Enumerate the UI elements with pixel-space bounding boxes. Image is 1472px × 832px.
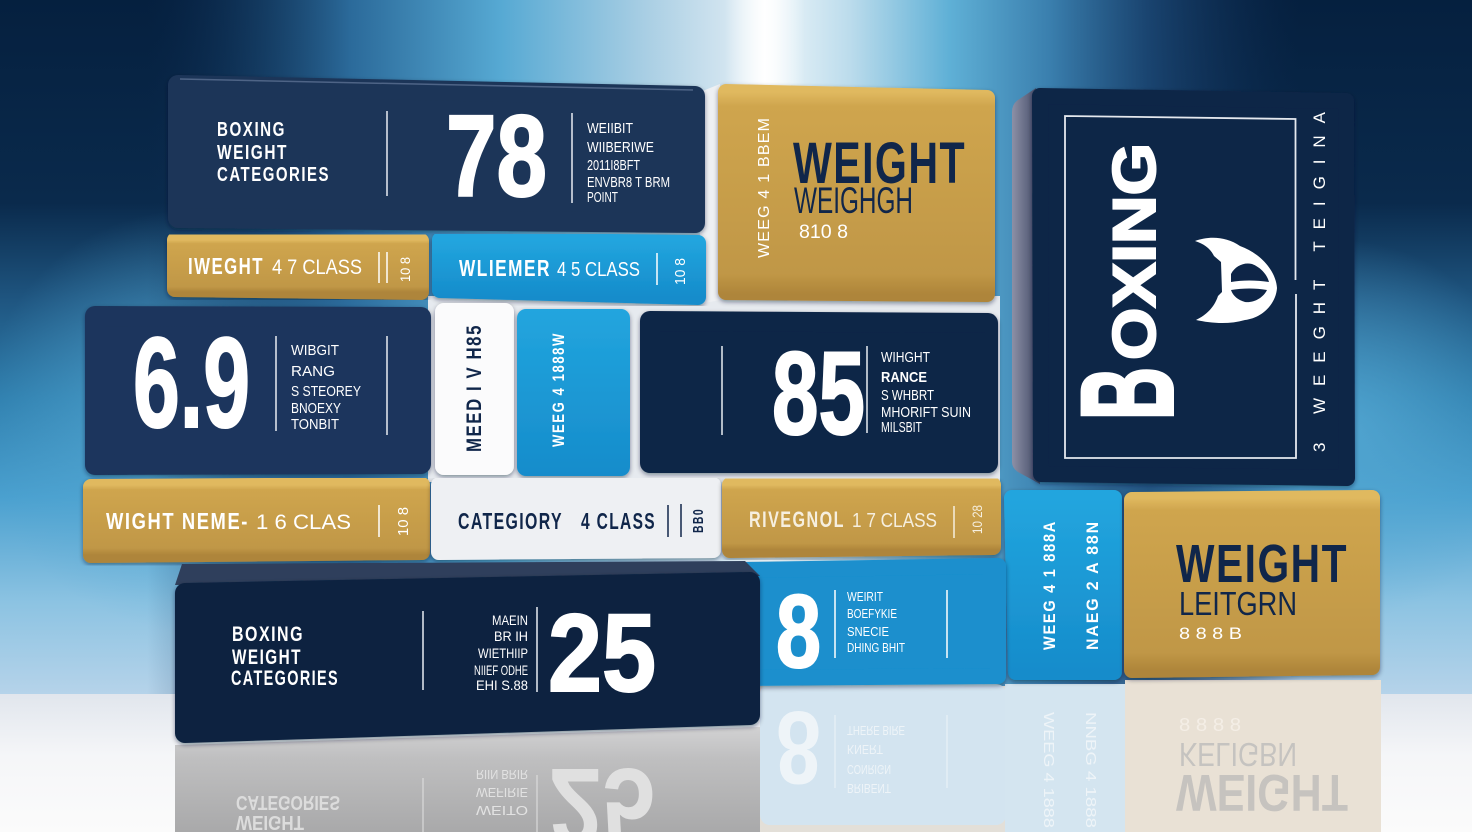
panel: gold weight class bar bbox=[175, 240, 421, 292]
frame bbox=[1065, 116, 1296, 458]
top face bbox=[175, 561, 760, 585]
small text block: BR IH bbox=[494, 628, 528, 644]
reflection: navy block: WEFIRIE bbox=[476, 785, 528, 800]
small text block: TONBIT bbox=[291, 416, 339, 433]
small numbers: 8 8 8 B bbox=[1179, 624, 1242, 643]
reflection: narrow blue block: NNBG 4 1888 bbox=[1082, 712, 1099, 828]
small text block: BNOEXY bbox=[291, 400, 341, 417]
vertical label: WEEG 4 1888W bbox=[549, 332, 568, 447]
small text block: WEIIBIT bbox=[587, 120, 633, 137]
title: boxing vertical: OXING bbox=[1101, 143, 1168, 360]
floor reflections of the blocks bbox=[175, 680, 1381, 832]
reflection: navy block bbox=[175, 727, 760, 832]
vertical label: WEEG 4 1 BBEM bbox=[756, 118, 773, 258]
label: 4 CLASS bbox=[581, 508, 656, 534]
title: boxing vertical: B bbox=[1054, 367, 1200, 420]
panel: blue weight class bar bbox=[440, 240, 698, 297]
number: 25: 25 bbox=[548, 592, 656, 715]
small text block: MAEIN bbox=[492, 612, 528, 628]
small text block: WIHGHT bbox=[881, 349, 930, 366]
number: 85: 85 bbox=[772, 328, 865, 460]
block side bbox=[1012, 88, 1040, 484]
small text block: ENVBR8 T BRM bbox=[587, 174, 670, 191]
heading: boxing weight categories: WEIGHT bbox=[217, 142, 288, 164]
small text block bbox=[587, 120, 670, 206]
label bbox=[749, 507, 937, 532]
label: class text: 4 5 CLASS bbox=[557, 259, 640, 281]
heading: boxing weight categories: CATEGORIES bbox=[217, 164, 330, 186]
panel: gold category bar bbox=[730, 485, 993, 550]
panel: gold category bar: 10 28 bbox=[969, 505, 985, 534]
small text block: WIIBERIWE bbox=[587, 139, 654, 156]
small text block bbox=[881, 349, 971, 436]
panel: white category bar bbox=[439, 485, 713, 552]
label: class text bbox=[459, 255, 640, 281]
small text block bbox=[847, 589, 905, 655]
panel: navy 25 block bbox=[175, 561, 760, 733]
reflection: navy block: CATEGORIES bbox=[236, 791, 340, 813]
small text block: WIBGIT bbox=[291, 342, 339, 359]
label: weight class: IWEGHT bbox=[188, 253, 264, 279]
panel: blue weight class bar: 10 8 bbox=[672, 258, 689, 285]
panel: white category bar: BB0 bbox=[690, 508, 707, 533]
panel: gold weight block lower bbox=[1132, 498, 1372, 670]
reflection: navy block: WEITO bbox=[476, 803, 528, 818]
small text block bbox=[291, 342, 361, 433]
panel: blue narrow block bbox=[1012, 498, 1114, 672]
reflection: narrow blue block bbox=[1005, 684, 1125, 832]
small number: 810 8 bbox=[799, 222, 848, 243]
light backing behind centre stack bbox=[428, 296, 1000, 482]
panel: blue 18 block bbox=[745, 566, 998, 690]
heading: boxing weight categories: BOXING bbox=[232, 623, 304, 646]
reflection: blue block: CONRIGN bbox=[847, 762, 891, 777]
heading: boxing weight categories: BOXING bbox=[217, 119, 286, 141]
reflection: narrow blue block: WEEG 4 1888 bbox=[1040, 712, 1057, 828]
icon: boxing glove emblem bbox=[1195, 238, 1277, 323]
reflection: blue block: BRIBENT bbox=[847, 781, 891, 796]
label: class text: WLIEMER bbox=[459, 255, 551, 281]
small text block: RANCE bbox=[881, 369, 927, 386]
panel: boxing cover block bbox=[1012, 88, 1347, 484]
reflective floor bbox=[0, 694, 1472, 832]
small text block: BOEFYKIE bbox=[847, 606, 897, 621]
reflection: blue block bbox=[760, 684, 1006, 832]
reflection: blue block: THERE BIRE bbox=[847, 723, 905, 738]
panel: gold weight name bar bbox=[91, 485, 422, 555]
small text block: S STEOREY bbox=[291, 383, 361, 400]
small text block: RANG bbox=[291, 363, 335, 380]
vertical labels: NAEG 2 A 88N bbox=[1083, 520, 1102, 650]
label: weight class bbox=[188, 253, 362, 279]
reflection: gold block: 8 8 8 8 bbox=[1179, 715, 1241, 735]
small text block: MILSBIT bbox=[881, 419, 922, 436]
reflection: gold block bbox=[1125, 680, 1381, 832]
small text block: SNECIE bbox=[847, 624, 889, 639]
reflection: navy block: RIIN BRIR bbox=[476, 767, 528, 782]
small text block bbox=[474, 612, 528, 693]
reflection: gold block: WEIGHT bbox=[1176, 763, 1348, 821]
number: 8: 8 bbox=[776, 574, 821, 690]
small text block: WEIRIT bbox=[847, 589, 883, 604]
vertical caption: 3 WEEGHT TEIGINA bbox=[1310, 111, 1329, 452]
reflection: blue block: 8 bbox=[776, 689, 821, 805]
label: WIGHT NEME- bbox=[106, 508, 249, 534]
label: weight class: 4 7 CLASS bbox=[272, 256, 362, 279]
vertical label: MEED I V H85 bbox=[463, 324, 486, 452]
small text block: DHING BHIT bbox=[847, 640, 905, 655]
small text block: POINT bbox=[587, 189, 618, 206]
panel: gold weight name bar: 10 8 bbox=[395, 507, 412, 536]
small text block: S WHBRT bbox=[881, 387, 934, 404]
number: 78: 78 bbox=[446, 91, 547, 221]
label: CATEGIORY bbox=[458, 508, 563, 534]
label: RIVEGNOL bbox=[749, 507, 845, 532]
subheading: LEITGRN bbox=[1179, 585, 1297, 622]
title: boxing vertical bbox=[1054, 143, 1200, 420]
small text block: 2011I8BFT bbox=[587, 157, 640, 174]
panel: gold weight block bbox=[726, 92, 987, 294]
heading: boxing weight categories bbox=[217, 119, 330, 186]
panel: blue vertical block bbox=[517, 309, 630, 476]
panel: navy 6.9 block bbox=[95, 312, 421, 465]
panel: gold weight class bar: 10 8 bbox=[397, 257, 413, 282]
white side of gold weight block bbox=[700, 84, 720, 304]
panel: white vertical block bbox=[435, 303, 514, 475]
vertical labels: WEEG 4 1 888A bbox=[1040, 520, 1059, 650]
panel: navy 85 block bbox=[650, 321, 988, 463]
heading: boxing weight categories: WEIGHT bbox=[232, 646, 302, 669]
small text block: NIIEF ODHE bbox=[474, 662, 528, 678]
number: 6.9: 6.9 bbox=[133, 312, 250, 455]
small text block: EHI S.88 bbox=[476, 677, 528, 693]
heading: weight: WEIGHT bbox=[793, 131, 966, 196]
label: 1 7 CLASS bbox=[852, 510, 937, 532]
heading: weight: WEIGHT bbox=[1176, 534, 1348, 594]
reflection: gold block: KELIGBN bbox=[1179, 736, 1297, 773]
small text block: MHORIFT SUIN bbox=[881, 404, 971, 421]
vertical labels bbox=[1040, 520, 1102, 650]
heading: boxing weight categories: CATEGORIES bbox=[231, 667, 339, 690]
panel: navy 78 block bbox=[178, 79, 695, 223]
heading: boxing weight categories bbox=[231, 623, 339, 690]
reflection: blue block: KNERT bbox=[847, 742, 883, 757]
small text block: WIETHIIP bbox=[478, 645, 528, 661]
subheading: WEIGHGH bbox=[794, 180, 913, 221]
label: 1 6 CLAS bbox=[256, 511, 351, 534]
